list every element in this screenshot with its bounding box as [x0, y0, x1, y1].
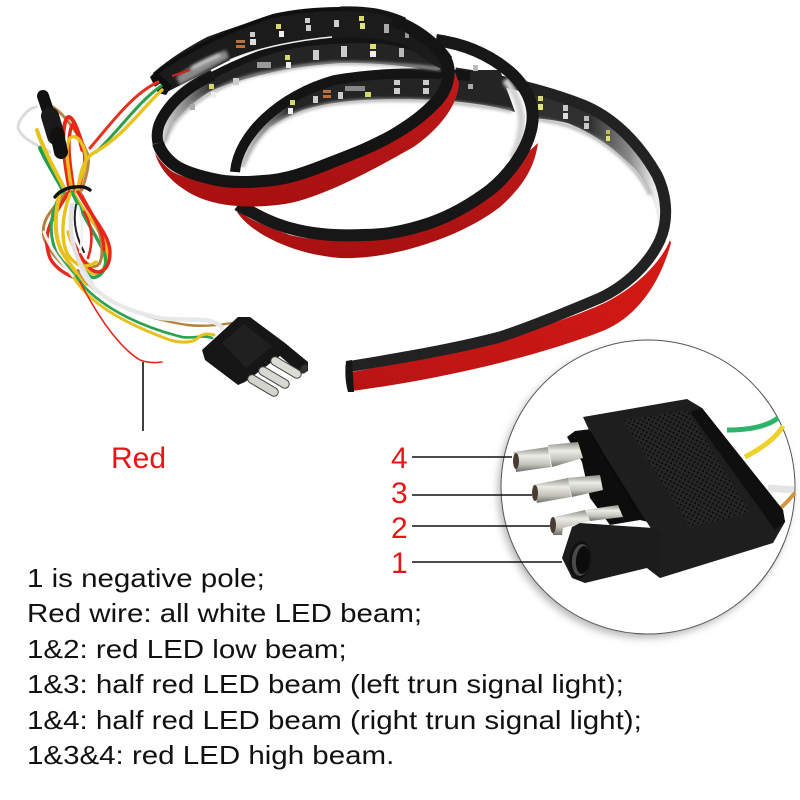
strip end connector	[150, 71, 172, 95]
wiring description text: 1&3: half red LED beam (left trun signal light);	[27, 670, 624, 699]
left lobe	[43, 193, 80, 280]
wiring description text: 1 is negative pole;	[27, 564, 265, 593]
wiring description text: 1&4: half red LED beam (right trun signal light);	[27, 706, 642, 735]
strip: rear loop with red tape	[237, 40, 538, 258]
green upper wire	[40, 148, 64, 192]
strip: front loop with red tape	[155, 9, 459, 206]
textured grip	[623, 410, 750, 527]
strip end cap	[345, 360, 354, 392]
pin numbers: 2	[391, 512, 408, 545]
pin numbers: 4	[391, 442, 408, 475]
socket tube	[562, 523, 662, 583]
yellow upper wire	[37, 130, 64, 188]
strip: back ring LED band	[232, 65, 515, 172]
inset connector body	[567, 399, 785, 578]
brown upper wire	[53, 107, 88, 190]
pin leader lines	[412, 457, 562, 562]
wiring description text: 1&3&4: red LED high beam.	[27, 741, 394, 770]
cable tie	[55, 187, 90, 197]
zoom inset circle	[498, 340, 795, 638]
wiring description text	[27, 564, 642, 770]
strip: top band LEDs	[153, 8, 452, 93]
pin 4	[513, 442, 583, 472]
pin 2	[550, 505, 623, 535]
wire harness	[18, 82, 232, 363]
inset wires	[727, 418, 795, 510]
strip: tail section	[345, 73, 671, 392]
strip: front ring LED band	[157, 40, 442, 143]
connector pins	[252, 361, 297, 392]
centre wires	[75, 205, 84, 252]
inset shadow	[498, 344, 792, 638]
pin numbers	[391, 442, 408, 580]
red upper loop	[63, 117, 85, 192]
wiring description text: 1&2: red LED low beam;	[27, 635, 347, 664]
right lobe	[68, 194, 107, 274]
pin 3	[532, 475, 603, 503]
LED strip	[150, 8, 671, 392]
pin numbers: 3	[391, 477, 408, 510]
wires from strip	[90, 82, 158, 148]
Red wire leader line	[142, 362, 144, 431]
wires to connector	[78, 270, 232, 326]
white loop wire	[18, 107, 50, 152]
Red wire label: Red	[111, 442, 166, 475]
pin numbers: 1	[391, 547, 408, 580]
yellow upper loop	[67, 137, 86, 192]
plug	[43, 96, 61, 152]
wiring description text: Red wire: all white LED beam;	[27, 599, 422, 628]
small flat connector	[202, 317, 310, 392]
